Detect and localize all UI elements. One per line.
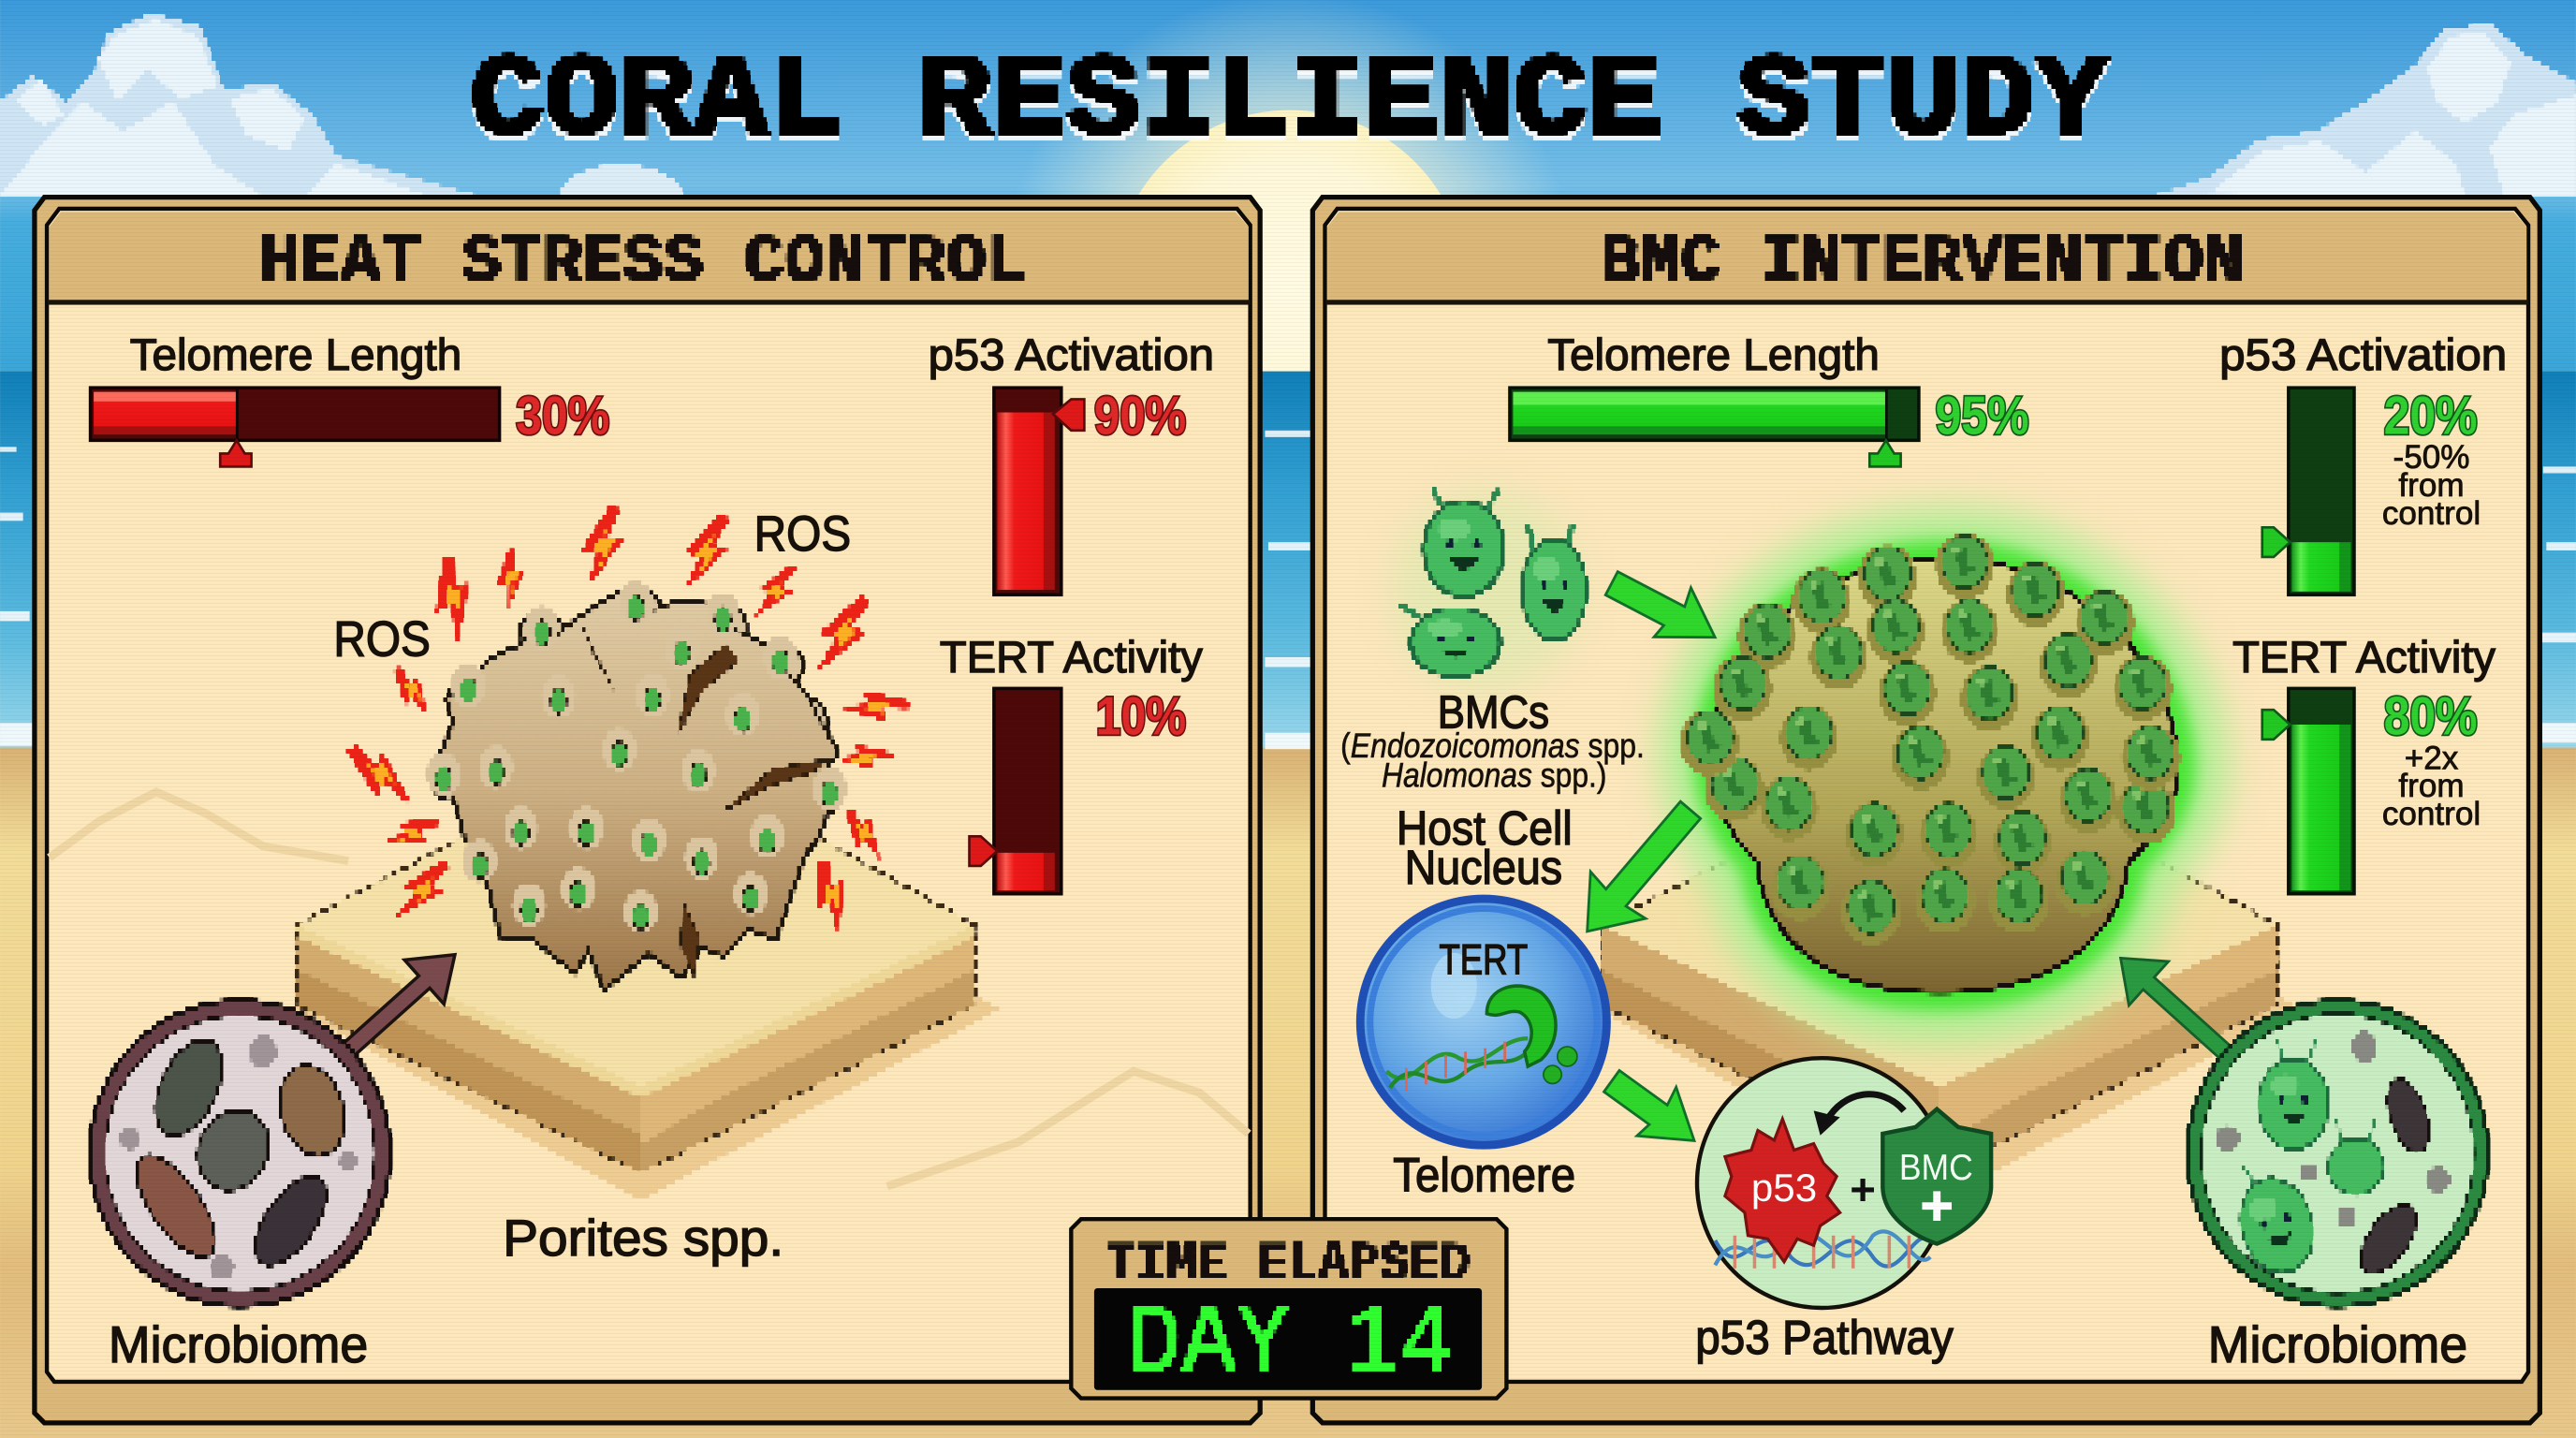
label: bmcs: BMCs <box>1438 687 1549 738</box>
sand platform: intervention <box>1599 835 2300 1199</box>
note: minus 50 percent from control: from <box>2398 467 2465 504</box>
arrow: nucleus to p53 <box>1594 1054 1714 1165</box>
background dunes <box>50 792 1249 1186</box>
coral body <box>1680 534 2180 992</box>
value: 10 percent: 10% <box>1096 686 1186 746</box>
note: minus 50 percent from control: -50% <box>2393 439 2469 476</box>
bar: tert 80 percent <box>2289 688 2354 894</box>
label: telomere length: Telomere Length <box>130 330 461 380</box>
label: porites: Porites spp. <box>503 1210 783 1267</box>
coral: bleached porites <box>427 581 846 990</box>
bar: p53 20 percent <box>2289 388 2354 594</box>
heading: heat stress control: HEAT STRESS CONTROL <box>259 225 1027 301</box>
sand platform: control <box>296 835 999 1199</box>
label: ros left: ROS <box>333 611 431 667</box>
coral: healthy porites with glow <box>1680 534 2180 992</box>
value: 90 percent: 90% <box>1094 386 1186 446</box>
chart: telomere length intervention <box>1510 330 2029 466</box>
arrow: bmcs to coral <box>1599 554 1730 662</box>
title: CORAL RESILIENCE STUDY <box>470 43 2110 175</box>
bar: telomere 30 percent <box>91 388 500 440</box>
icon: bmc shield <box>1882 1109 1991 1244</box>
panel: time elapsed counter <box>1071 1219 1506 1402</box>
chart: tert activity intervention <box>2232 633 2496 894</box>
icon: dysbiotic microbiome <box>91 1001 389 1306</box>
marker: p53 intervention <box>2262 527 2291 557</box>
bar: p53 90 percent <box>994 388 1061 594</box>
title: CORAL RESILIENCE STUDY <box>470 37 2110 169</box>
arrow: microbiome to coral intervention <box>2100 936 2245 1074</box>
label: ros upper: ROS <box>754 506 851 562</box>
icon: host cell nucleus <box>1360 899 1606 1145</box>
label: p53 activation: p53 Activation <box>929 330 1214 380</box>
marker: tert control <box>970 836 997 866</box>
marker: telomere control <box>220 440 252 466</box>
panel frame: intervention <box>1312 198 2539 1423</box>
value: 80 percent: 80% <box>2384 686 2478 746</box>
label: tert: TERT <box>1439 936 1528 984</box>
panel: heat stress control <box>35 198 1260 1423</box>
chart: telomere length control <box>91 330 609 466</box>
label: microbiome control: Microbiome <box>109 1316 368 1373</box>
label: plus: + <box>1850 1165 1876 1214</box>
label: tert activity: TERT Activity <box>940 633 1203 682</box>
chart: p53 activation intervention <box>2219 330 2507 594</box>
bar: telomere 95 percent <box>1510 388 1919 440</box>
value: 20 percent: 20% <box>2384 386 2478 446</box>
icon: bmc bacteria <box>1392 490 1586 694</box>
note: plus 2x from control: control <box>2382 796 2481 832</box>
note: plus 2x from control: from <box>2398 768 2465 804</box>
label: p53 pathway: p53 Pathway <box>1695 1311 1954 1364</box>
note: plus 2x from control: +2x <box>2405 740 2459 776</box>
glow <box>1711 559 2177 992</box>
chart: tert activity control <box>940 633 1203 894</box>
note: minus 50 percent from control: control <box>2382 495 2481 532</box>
clouds: left <box>0 13 683 237</box>
panel: bmc intervention <box>1312 198 2539 1423</box>
label: time elapsed: TIME ELAPSED <box>1105 1234 1471 1295</box>
arrow: curved inhibition <box>1814 1094 1904 1136</box>
value: 30 percent: 30% <box>516 386 609 446</box>
arrow: coral to nucleus <box>1559 786 1718 955</box>
arrow: microbiome to coral control <box>329 932 475 1072</box>
label: p53 activation intervention: p53 Activation <box>2219 330 2507 380</box>
marker: telomere intervention <box>1869 440 1901 466</box>
label: host cell nucleus: Host Cell <box>1397 801 1573 855</box>
label: p53: p53 <box>1751 1166 1817 1210</box>
heading: bmc intervention: BMC INTERVENTION <box>1600 225 2244 301</box>
label: host cell nucleus: Nucleus <box>1405 841 1562 894</box>
label: bmc species: Halomonas spp.) <box>1382 756 1618 795</box>
label: tert activity intervention: TERT Activity <box>2232 633 2496 682</box>
marker: p53 control <box>1053 399 1084 431</box>
label: microbiome intervention: Microbiome <box>2208 1316 2467 1373</box>
icon: healthy microbiome <box>2188 1001 2487 1306</box>
label: telomere: Telomere <box>1393 1148 1575 1201</box>
icon: p53 pathway <box>1697 1058 1991 1308</box>
value: 95 percent: 95% <box>1935 386 2029 446</box>
icon: bmc shield: BMC <box>1899 1148 1973 1188</box>
display: day 14: DAY 14 <box>1127 1286 1454 1402</box>
icon: tert enzyme <box>1486 986 1577 1083</box>
marker: tert intervention <box>2262 710 2291 740</box>
chart: p53 activation control <box>929 330 1214 594</box>
panel frame: control <box>35 198 1260 1423</box>
label: bmc species: (Endozoicomonas spp. <box>1340 726 1655 765</box>
label: telomere length intervention: Telomere Length <box>1547 330 1880 380</box>
icon: ros lightning bolts <box>335 505 913 937</box>
icon: dna helix <box>1715 1231 1930 1269</box>
clouds: right <box>2150 23 2576 198</box>
bar: tert 10 percent <box>994 688 1061 894</box>
icon: dna strand <box>1386 1038 1528 1091</box>
icon: p53 protein <box>1725 1119 1840 1262</box>
